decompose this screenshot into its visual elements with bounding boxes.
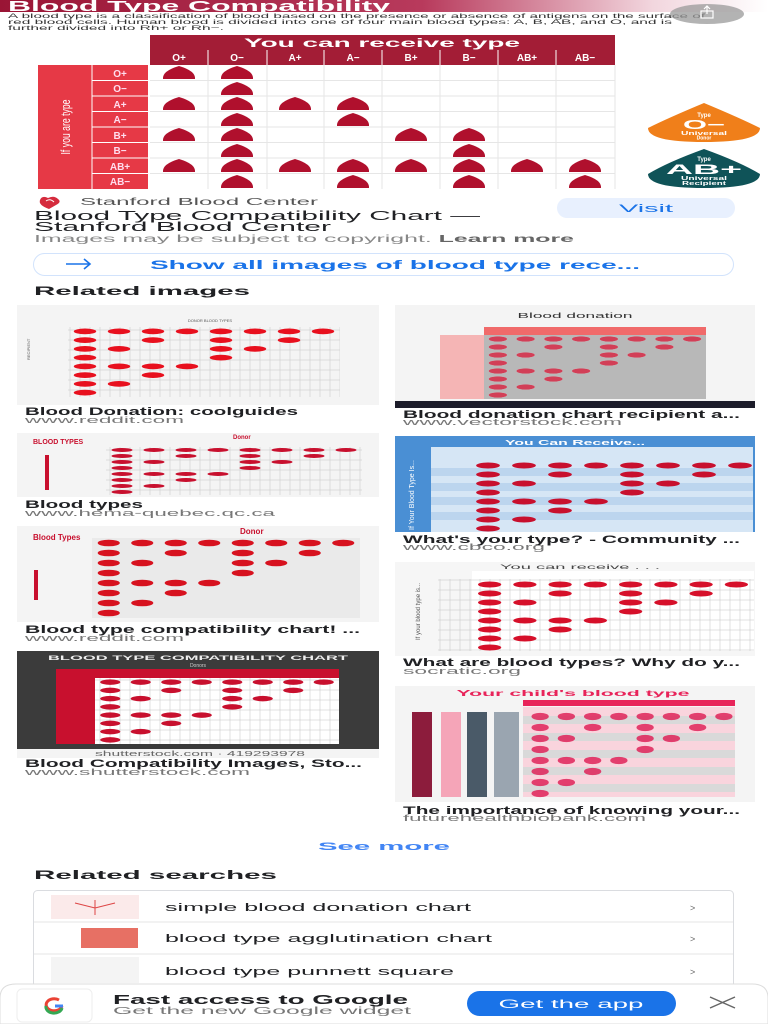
get the app button — [467, 991, 676, 1016]
column headers: A+ — [288, 53, 302, 64]
caption: hema-quebec: Blood types — [25, 499, 143, 511]
caption: shutterstock — [22, 758, 362, 777]
search item 3 — [51, 957, 695, 983]
badge: universal recipient: Type — [697, 157, 711, 163]
badge: universal recipient: Recipient — [682, 181, 727, 187]
thumb: reddit chart: Blood Types — [33, 533, 81, 542]
description text: A blood type is a classification of blood based on the presence or absence of antigens on the surface of — [8, 13, 705, 20]
visit button: Visit — [619, 203, 673, 215]
blood drops — [163, 66, 601, 188]
search item 3: > — [690, 967, 695, 977]
thumb: coolguides: DONOR BLOOD TYPES — [188, 318, 232, 323]
caption: socratic — [403, 657, 740, 676]
caption: socratic: socratic.org — [403, 666, 521, 676]
caption: cbco — [400, 534, 740, 552]
thumb: socratic: If your blood type is... — [416, 583, 422, 640]
heading: related images: Related images — [34, 284, 251, 298]
thumb: socratic: You can receive . . . — [500, 565, 661, 571]
copyright notice: Images may be subject to copyright. Learn more — [34, 234, 575, 245]
caption: coolguides — [22, 406, 298, 425]
column headers: B+ — [404, 53, 418, 64]
compatibility chart — [38, 35, 615, 189]
search item 3: blood type punnett square — [165, 966, 454, 978]
search item 1 — [51, 895, 695, 919]
badge: universal donor: Universal — [681, 131, 728, 137]
banner text: Fast access to Google — [113, 992, 408, 1007]
row label block: B− — [113, 146, 127, 157]
chart header — [150, 35, 615, 50]
badge: universal recipient: AB+ — [666, 161, 742, 177]
row label block: A− — [113, 115, 127, 126]
row label block: AB− — [110, 177, 130, 188]
search item 2: blood type agglutination chart — [165, 933, 492, 945]
banner text — [113, 992, 412, 1017]
see more link: See more — [318, 841, 450, 853]
thumb: cbco: If Your Blood Type Is... — [409, 460, 416, 530]
caption: future health: futurehealthbiobank.com — [403, 813, 646, 823]
caption: coolguides: www.reddit.com — [22, 415, 184, 425]
caption: vectorstock: www.vectorstock.com — [400, 417, 622, 427]
caption: hema-quebec — [23, 499, 275, 518]
caption: hema-quebec: www.hema-quebec.qc.ca — [23, 508, 275, 518]
caption: reddit chart — [22, 624, 360, 643]
badge: universal recipient — [648, 149, 760, 188]
caption: shutterstock: Blood Compatibility Images, Sto... — [25, 758, 362, 770]
result title: Blood Type Compatibility Chart — — [34, 208, 480, 223]
chart header: You can receive type — [244, 36, 521, 50]
caption: socratic: What are blood types? Why do y... — [403, 657, 740, 669]
result title: Stanford Blood Center — [34, 219, 333, 234]
show all button: Show all images of blood type rece... — [150, 258, 640, 272]
thumb: cbco — [395, 436, 755, 532]
badge: universal donor — [648, 103, 760, 142]
row label block: AB+ — [110, 162, 130, 173]
visit button — [557, 198, 735, 218]
description text: further divided into Rh+ or Rh−. — [8, 25, 224, 32]
column headers: AB− — [575, 53, 595, 64]
row label block: A+ — [113, 100, 127, 111]
icon: share button — [670, 4, 744, 24]
thumb: coolguides: RECIPIENT — [26, 338, 31, 360]
description text — [8, 13, 705, 32]
column headers: B− — [462, 53, 476, 64]
banner text: Get the new Google widget — [113, 1006, 412, 1017]
thumb: socratic — [395, 562, 755, 656]
caption: reddit chart: www.reddit.com — [22, 633, 184, 643]
row label block: B+ — [113, 131, 127, 142]
result card — [0, 189, 768, 289]
row label block: If you are type — [58, 100, 73, 154]
badge: universal donor: Donor — [697, 136, 711, 142]
thumb: hema-quebec: BLOOD TYPES — [33, 439, 84, 446]
search item 1: simple blood donation chart — [165, 902, 471, 914]
thumb: shutterstock: BLOOD TYPE COMPATIBILITY CHART — [48, 656, 349, 662]
caption: shutterstock: www.shutterstock.com — [22, 767, 250, 777]
row label block: O+ — [113, 69, 127, 80]
badge: universal donor: Type — [697, 113, 711, 119]
column headers: O+ — [172, 53, 186, 64]
thumb: vectorstock — [395, 305, 755, 408]
description text: red blood cells. Human blood is divided into one of four main blood types: A, B, AB, and O, and is — [8, 19, 674, 26]
column headers — [150, 50, 615, 65]
related searches list — [34, 890, 734, 1000]
caption: cbco: What's your type? - Community ... — [403, 534, 740, 546]
heading: related searches: Related searches — [34, 868, 278, 882]
thumb: shutterstock — [17, 651, 379, 758]
thumb: hema-quebec: Donor — [233, 435, 251, 441]
search item 1: > — [690, 903, 695, 913]
row label block: O− — [113, 84, 127, 95]
caption: reddit chart: Blood type compatibility chart! ... — [25, 624, 360, 636]
thumb: cbco: You Can Receive... — [505, 440, 645, 447]
icon: stanford logo — [40, 197, 60, 209]
thumb: shutterstock: Donors — [190, 663, 207, 669]
icon: google logo — [17, 989, 92, 1022]
thumb: shutterstock: shutterstock.com · 419293978 — [95, 751, 305, 758]
thumb: reddit chart: Donor — [240, 527, 264, 536]
caption: future health: The importance of knowing your... — [403, 805, 740, 817]
show all button — [34, 254, 734, 276]
search item 2 — [51, 926, 695, 950]
icon: close — [710, 997, 735, 1008]
badge: universal recipient: Universal — [681, 176, 728, 182]
result title — [34, 208, 480, 234]
source name: Stanford Blood Center — [80, 197, 320, 208]
thumb: future health: Your child's blood type — [456, 689, 691, 698]
caption: future health — [403, 805, 740, 823]
row label block — [38, 65, 148, 189]
column headers: A− — [346, 53, 360, 64]
caption: cbco: www.cbco.org — [400, 542, 545, 552]
thumb: reddit chart — [17, 526, 379, 622]
title bar — [0, 0, 768, 15]
grid — [150, 65, 615, 189]
bottom app banner — [0, 984, 768, 1024]
thumb: coolguides — [17, 305, 379, 405]
thumb: future health — [395, 686, 755, 802]
thumb: hema-quebec — [17, 433, 379, 497]
badge: universal donor: O− — [683, 117, 726, 132]
caption: vectorstock: Blood donation chart recipient a... — [403, 409, 740, 421]
column headers: AB+ — [517, 53, 537, 64]
column headers: O− — [230, 53, 244, 64]
get the app button: Get the app — [498, 997, 644, 1011]
thumb: vectorstock: Blood donation — [518, 313, 633, 320]
caption: coolguides: Blood Donation: coolguides — [25, 406, 298, 418]
search item 2: > — [690, 934, 695, 944]
caption: vectorstock — [400, 409, 740, 427]
